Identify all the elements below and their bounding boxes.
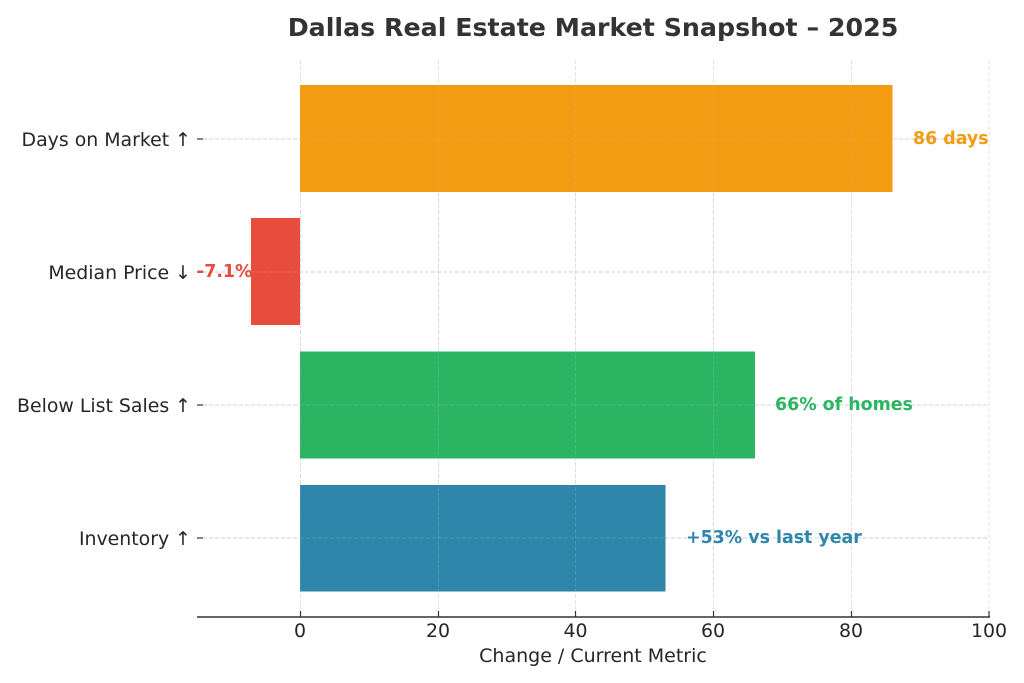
- x axis: 60: [701, 620, 725, 642]
- x axis title: Change / Current Metric: [479, 645, 707, 667]
- x axis: 40: [563, 620, 588, 642]
- y axis labels: [17, 129, 191, 550]
- y axis labels: Days on Market ↑: [22, 129, 191, 151]
- x axis: 0: [294, 620, 306, 642]
- bar: Median Price: [251, 218, 300, 325]
- bar: Below List Sales: [300, 352, 755, 458]
- x axis: 80: [839, 620, 863, 642]
- value label: -7.1%: -7.1%: [197, 262, 252, 282]
- x axis: [197, 611, 1007, 642]
- y axis labels: Inventory ↑: [79, 528, 191, 550]
- y axis labels: Below List Sales ↑: [17, 395, 191, 417]
- value label: 66% of homes: 66% of homes: [775, 395, 913, 415]
- bar: Inventory: [300, 485, 666, 592]
- title: Dallas Real Estate Market Snapshot – 2025: [288, 13, 898, 42]
- value label: 86 days: 86 days: [913, 129, 989, 149]
- y axis labels: Median Price ↓: [48, 262, 191, 284]
- x axis: 20: [426, 620, 450, 642]
- x axis: 100: [971, 620, 1007, 642]
- value label: +53% vs last year: +53% vs last year: [686, 528, 862, 548]
- bar: Days on Market: [300, 85, 892, 192]
